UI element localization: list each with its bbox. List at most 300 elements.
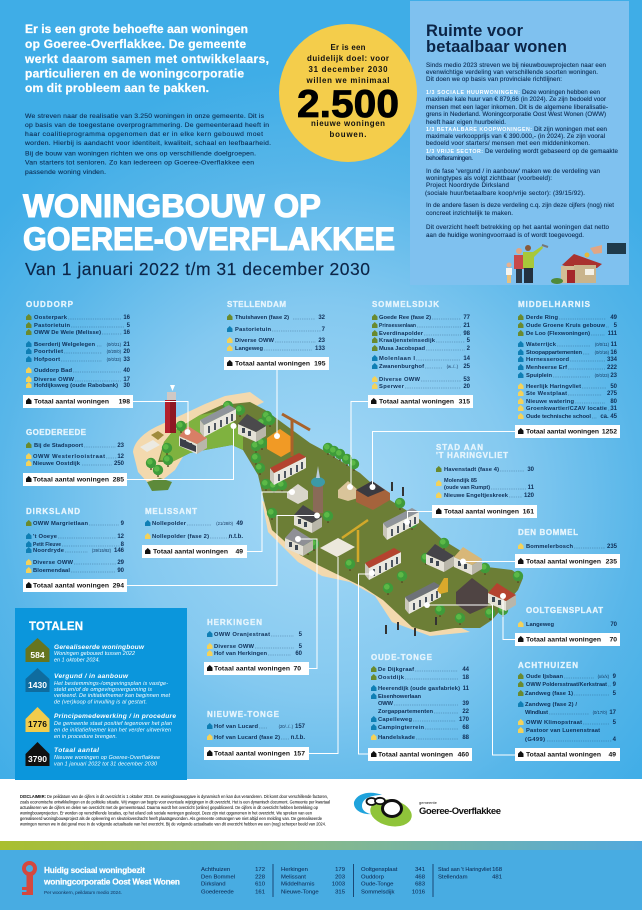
- total box: 294: [113, 582, 124, 590]
- total box: 49: [235, 548, 243, 556]
- total box: Totaal aantal woningen: [526, 752, 601, 758]
- table: sociaal woningbezit per kern: Melissant: [281, 874, 306, 880]
- district: Herkingen: HERKINGEN: [207, 618, 262, 627]
- total: principemedewerking: [26, 707, 176, 740]
- district: Middelharnis: Spuiplein: [526, 373, 552, 379]
- district: Dirksland: DIRKSLAND: [26, 507, 80, 516]
- total box: [368, 395, 473, 408]
- total box: Totaal aantal woningen: [153, 548, 228, 556]
- district: Middelharnis: 23: [610, 373, 618, 379]
- total box: 460: [458, 752, 469, 758]
- panel heading: betaalbaar wonen: [426, 38, 567, 56]
- district: Goedereede: 12: [117, 454, 125, 460]
- light green west meadow: [160, 410, 243, 462]
- intro body text: Van starters tot senioren. Zo kan iedereen op Goeree-Overflakkee een: [25, 160, 254, 166]
- bottom bar background: [0, 850, 642, 910]
- district: Middelharnis: 31: [610, 406, 618, 412]
- district: Achthuizen: 17: [609, 710, 617, 716]
- table: sociaal woningbezit per kern: 172: [255, 867, 265, 873]
- district: Ouddorp: (0/20/0): [107, 349, 122, 354]
- district: Ouddorp: Poortvliet: [34, 349, 63, 355]
- district: Achthuizen: Pastoor van Luenenstraat: [526, 728, 600, 734]
- district: Achthuizen: Zandweg (fase 1): [525, 691, 573, 697]
- district: Sommelsdijk: Sperwer: [379, 384, 405, 390]
- district: Stad aan 't Haringvliet: STAD AAN: [436, 443, 483, 452]
- district: Sommelsdijk: Everdinapolder: [379, 331, 424, 337]
- district: Middelharnis: (0/0/23): [595, 373, 610, 378]
- district: Achthuizen: 5: [613, 691, 617, 697]
- goal circle: 31 december 2030: [308, 65, 388, 74]
- intro body text: haar coalitieprogramma opgenomen dat er in elke kern gebouwd moet: [25, 131, 263, 138]
- district: Sommelsdijk: 25: [463, 364, 471, 370]
- district: Ouddorp: [23, 300, 133, 408]
- district: Stellendam: Pastorietuin: [235, 327, 271, 333]
- table: sociaal woningbezit per kern: 228: [255, 874, 266, 880]
- illustration: family with keys: [506, 245, 548, 283]
- district: Dirksland: 29: [117, 560, 125, 566]
- district: Herkingen: OWW Oranjestraat: [214, 632, 270, 638]
- panel text: In de andere fasen is deze verdeling c.q. zijn deze cijfers (nog) niet: [426, 202, 614, 209]
- disclaimer text: woningen nemen we in dat geval mee in de volgende actualisatie van het overzicht. Bij de volgende actualisatie van dit overzicht hebben we een (nog) scherper beeld van 2024.: [20, 822, 326, 826]
- district: Herkingen: 60: [295, 651, 303, 657]
- district: Stellendam: 133: [315, 346, 326, 352]
- district: Achthuizen: 9: [613, 682, 617, 688]
- district: Oude-Tonge: OUDE-TONGE: [371, 653, 433, 662]
- district: Middelharnis: Stoopappartementen: [526, 350, 582, 356]
- table: sociaal woningbezit per kern: [201, 864, 503, 897]
- disclaimer text: zoals economische ontwikkelingen en de politieke situatie. Wij vragen uw begrip voor eventuele wijzigingen in dit overzicht. Het is een dynamisch document. Gemeente per kwartaal: [20, 800, 330, 804]
- land: [158, 402, 523, 632]
- district: Ouddorp: Hofpoort: [34, 357, 60, 363]
- total box: Totaal aantal woningen: [34, 398, 109, 406]
- district: Goedereede: GOEDEREEDE: [26, 428, 87, 437]
- district: Achthuizen: OWW Klimopstraat: [526, 720, 582, 726]
- goal circle: [279, 24, 417, 162]
- total: vergund: [26, 668, 170, 706]
- district: Middelharnis: Nieuwe watering: [526, 399, 574, 405]
- district: Melissant: n.t.b.: [229, 534, 243, 540]
- district: Nieuwe-Tonge: Hof van Lucard: [214, 724, 258, 730]
- total box: 1252: [602, 428, 617, 436]
- logo: gemeente Goeree-Overflakkee: gemeente: [419, 800, 438, 805]
- district: Melissant: Nollepolder: [152, 521, 187, 527]
- district: Oude-Tonge: Capelleweg: [378, 717, 412, 723]
- district: Ouddorp: (0/0/21): [107, 342, 122, 347]
- district: Goedereede: 23: [117, 443, 125, 449]
- district: Oude-Tonge: Zorgappartementen: [378, 709, 433, 715]
- district: Oude-Tonge: 18: [462, 675, 470, 681]
- district: Herkingen: Diverse OWW: [214, 644, 255, 650]
- total box: 198: [119, 398, 130, 406]
- district: Ouddorp: 40: [123, 368, 131, 374]
- district: Dirksland: Petit Fleuve: [33, 542, 62, 548]
- district: Nieuwe-Tonge: n.t.b.: [291, 735, 305, 741]
- total: vergund: verleend. De initiatiefnemer kan beginnen met: [54, 693, 170, 699]
- district: Ouddorp: 17: [123, 377, 131, 383]
- district: Ouddorp: Diverse OWW: [34, 377, 75, 383]
- total box: Totaal aantal woningen: [33, 582, 109, 590]
- district: Den Bommel: Bommelerbosch: [526, 544, 573, 550]
- total box: [224, 357, 329, 370]
- district: Sommelsdijk: SOMMELSDIJK: [372, 300, 439, 309]
- district: Oude-Tonge: 44: [462, 667, 470, 673]
- district: Ouddorp: 5: [127, 323, 131, 329]
- district: Sommelsdijk: Prinsessenlaan: [379, 323, 416, 329]
- district: Melissant: [142, 507, 247, 558]
- district: Stad aan 't Haringvliet: (oude van Rumpt): [444, 485, 490, 491]
- subtitle date range: Van 1 januari 2022 t/m 31 december 2030: [25, 259, 370, 279]
- district: Nieuwe-Tonge: NIEUWE-TONGE: [207, 710, 280, 719]
- district: Nieuwe-Tonge: [204, 710, 309, 760]
- district: Middelharnis: 275: [607, 391, 618, 397]
- total: totaal aantal: Nieuwe woningen op Goeree-Overflakkee: [54, 755, 160, 761]
- panel text: woningtypes als volgt zichtbaar (voorbeeld):: [425, 175, 552, 182]
- panel text: evenwichtige verdeling van verschillende soorten woningen.: [426, 69, 598, 76]
- social housing heading: Per woonkern, peildatum medio 2024.: [44, 890, 122, 896]
- panel text: maximale kale huur van € 879,66 (in 2024). Ze zijn bedoeld voor: [426, 96, 606, 103]
- table: sociaal woningbezit per kern: Nieuwe-Tonge: [281, 890, 319, 896]
- district: Dirksland: OWW Margrietlaan: [33, 521, 88, 527]
- table: sociaal woningbezit per kern: 315: [335, 890, 346, 896]
- district: Stad aan 't Haringvliet: 120: [524, 493, 535, 499]
- district: Middelharnis: Heerlijk Haringvliet: [526, 384, 581, 390]
- district: Herkingen: [204, 618, 309, 675]
- district: Sommelsdijk: 21: [463, 323, 471, 329]
- district: Ouddorp: 20: [123, 349, 131, 355]
- district: Oude-Tonge: Oostdijk: [378, 675, 405, 681]
- district: Ouddorp: Pastorietuin: [34, 323, 70, 329]
- social housing heading: Huidig sociaal woningbezit: [44, 865, 145, 875]
- district: Oude-Tonge: OWW: [378, 701, 394, 707]
- total box: [204, 662, 309, 675]
- district: Middelharnis: ca. 45: [600, 414, 618, 420]
- total box: [204, 747, 309, 760]
- district: Oude-Tonge: 68: [462, 725, 470, 731]
- district: Sommelsdijk: 20: [463, 384, 471, 390]
- white disclaimer band: [0, 779, 642, 841]
- district: Dirksland: 12: [117, 534, 125, 540]
- district: Middelharnis: Ste Westplaat: [526, 391, 567, 397]
- disclaimer text: DISCLAIMER: De peildatum van de cijfers in dit overzicht is 1 oktober 2024. De woningbouwopgave is dynamisch en kan dus veranderen. Dit komt door verschillende factoren,: [20, 794, 328, 799]
- panel text: Deze woningen hebben een: [522, 89, 601, 96]
- total box: [515, 633, 620, 646]
- goal circle: willen we minimaal: [306, 76, 390, 85]
- district: Oude-Tonge: Eisenhowerlaan: [378, 694, 421, 700]
- panel text: Project Noordryde Dirksland: [426, 182, 510, 189]
- total box: [23, 579, 127, 592]
- total box: 161: [523, 508, 534, 516]
- goal circle: 2.500: [297, 83, 399, 126]
- shore posts: [386, 482, 436, 636]
- table: sociaal woningbezit per kern: 468: [415, 874, 426, 880]
- district: Oude-Tonge: 39: [462, 701, 470, 707]
- table: sociaal woningbezit per kern: Oude-Tonge: [361, 882, 394, 888]
- district: Middelharnis: Derde Ring: [526, 315, 558, 321]
- total: vergund: steld en/of de omgevingsvergunning is: [54, 687, 152, 693]
- total: gerealiseerd: Woningen gebouwd tussen 2022: [54, 651, 135, 657]
- trees: [146, 401, 523, 625]
- district: Oude-Tonge: 22: [462, 709, 470, 715]
- district: Oude-Tonge: De Dijkgraaf: [378, 667, 414, 673]
- district: Middelharnis: 5: [614, 323, 618, 329]
- disclaimer text: woningbouwprojecten. Er worden op verschillende locaties, op het eiland ook sociale woningen gesloopt. Deze zijn niet opgenomen in het overzicht. We spreken van een: [20, 810, 313, 816]
- district: Ouddorp: 16: [123, 330, 131, 336]
- district: Dirksland: 146: [114, 548, 125, 554]
- district: Ooltgensplaat: Langeweg: [526, 622, 554, 628]
- total: gerealiseerd: 584: [30, 650, 45, 660]
- total: principemedewerking: en in procedure brengen.: [54, 734, 117, 740]
- table: sociaal woningbezit per kern: Stad aan 't Haringvliet: [438, 867, 491, 873]
- main title: GOEREE-OVERFLAKKEE: [23, 221, 395, 257]
- total box: [23, 395, 133, 408]
- district: Ooltgensplaat: OOLTGENSPLAAT: [526, 606, 603, 615]
- panel: totalen: [15, 608, 187, 780]
- district: Sommelsdijk: (w../..): [447, 364, 459, 369]
- total: principemedewerking: en de initiatiefnemer kan het verder uitwerken: [54, 728, 171, 734]
- panel text: mensen met een lager inkomen. Dit is de algemene liberalisatie-: [426, 104, 608, 111]
- district: Middelharnis: MIDDELHARNIS: [518, 300, 591, 309]
- main title: [23, 188, 395, 257]
- district: Sommelsdijk: Molenlaan I: [379, 356, 415, 362]
- total box: 70: [609, 636, 617, 644]
- beach sand: [133, 392, 470, 636]
- total: gerealiseerd: Gerealiseerde woningbouw: [54, 644, 145, 651]
- right panel: betaalbaar wonen: [410, 1, 629, 285]
- district: Oude-Tonge: Campingterrein: [378, 725, 424, 731]
- total box: 285: [113, 476, 124, 484]
- district: Achthuizen: (x/x/x): [598, 674, 610, 679]
- intro body text: worden. Hierbij is aandacht voor identiteit, kwaliteit, schaal en leefbaarheid.: [24, 140, 271, 147]
- panel text: Sinds medio 2023 streven we bij nieuwbouwprojecten naar een: [426, 62, 607, 69]
- intro body text: op basis van de toegestane overprogrammering. De gemeenteraad heeft in: [25, 122, 269, 129]
- total box: [432, 505, 537, 518]
- district: Goedereede: OWW Westerlooistraat: [33, 454, 105, 460]
- illustration: house and hand: [551, 243, 626, 284]
- panel text: Dit overzicht heeft betrekking op het aantal woningen dat netto: [426, 224, 610, 231]
- building plot: [320, 538, 355, 557]
- table: sociaal woningbezit per kern: 179: [335, 867, 345, 873]
- district: Stad aan 't Haringvliet: Nieuwe Engeltjeskreek: [444, 493, 509, 499]
- district: Achthuizen: 4: [613, 737, 617, 743]
- district: Stellendam: 23: [318, 338, 326, 344]
- table: sociaal woningbezit per kern: Sommelsdijk: [361, 890, 394, 896]
- table: sociaal woningbezit per kern: Ooltgensplaat: [361, 867, 398, 873]
- panel text: (sociale huur/betaalbare koop/vrije sector): (39/15/92).: [425, 190, 585, 197]
- table: sociaal woningbezit per kern: 341: [415, 867, 425, 873]
- district: Middelharnis: (0/0/16): [595, 350, 610, 355]
- total: vergund: 1430: [28, 680, 47, 690]
- table: sociaal woningbezit per kern: Stellendam: [438, 874, 468, 880]
- panel text: heeft haar eigen huurbeleid.: [426, 119, 506, 126]
- district: Dirksland: Bloemendaal: [33, 568, 70, 574]
- total: gerealiseerd: en 1 oktober 2024.: [54, 658, 100, 664]
- district: Stellendam: Langeweg: [235, 346, 263, 352]
- district: Dirksland: Noordryde: [33, 548, 65, 554]
- district: Sommelsdijk: 2: [467, 346, 471, 352]
- total box: [515, 554, 620, 568]
- panel text: [425, 62, 619, 239]
- district: Middelharnis: 334: [607, 357, 618, 363]
- district: Stad aan 't Haringvliet: 'T HARINGVLIET: [436, 451, 508, 460]
- table: sociaal woningbezit per kern: Dirksland: [201, 882, 226, 888]
- intro heading: op Goeree-Overflakkee. De gemeente: [25, 37, 246, 51]
- district: Sommelsdijk: 5: [467, 338, 471, 344]
- district: Achthuizen: OWW Poldersstraat/Kerkstraat: [526, 682, 607, 688]
- district: Stellendam: Thuishaven (fase 2): [235, 315, 289, 321]
- district: Sommelsdijk: [368, 300, 473, 408]
- intro heading: werkt daarom samen met ontwikkelaars,: [24, 52, 269, 66]
- district: Sommelsdijk: Goede Ree (fase 2): [379, 315, 431, 321]
- district: Nieuwe-Tonge: 157: [295, 724, 306, 730]
- panel text: grens in Nederland. Woningcorporatie Oost West Wonen (OWW): [426, 111, 606, 118]
- district: Middelharnis: [515, 300, 620, 438]
- disclaimer text: actualiseren we de cijfers en delen we overzicht met de gemeenteraad. Daarna wordt het overzicht (online) gepubliceerd. De cijfers in dit overzicht hebben betrekking op: [20, 805, 319, 810]
- table: sociaal woningbezit per kern: Achthuizen: [201, 867, 230, 873]
- district: Oude-Tonge: 170: [459, 717, 470, 723]
- district: Dirksland: 9: [121, 521, 125, 527]
- disclaimer text: gerealiseerd woningbouwproject als de oplevering en sleuteloverdracht heeft plaatsgevonden. Als gemeente ontvangen we niet altijd een melding van. De gerealiseerde: [20, 816, 323, 821]
- district: Oude-Tonge: Handelskade: [378, 735, 416, 741]
- panel heading: Ruimte voor: [426, 22, 524, 40]
- total box: 195: [314, 360, 326, 368]
- total: vergund: de (ver)koop of invulling is al gestart.: [54, 700, 147, 706]
- total box: 49: [608, 752, 616, 758]
- district: Herkingen: 5: [299, 632, 303, 638]
- district: Achthuizen: Oude Ijsbaan: [526, 674, 563, 680]
- total box: Totaal aantal woningen: [235, 360, 310, 368]
- intro body text: [24, 113, 271, 176]
- goal circle: bouwen.: [330, 130, 366, 139]
- district: Sommelsdijk: Kraaijensteinsedijk: [379, 338, 436, 344]
- district: Achthuizen: (0/17/0): [593, 710, 608, 715]
- district: Achthuizen: [515, 661, 620, 761]
- district: Stad aan 't Haringvliet: 30: [527, 467, 535, 473]
- total: totaal aantal: 3790: [28, 754, 47, 764]
- totalen heading: TOTALEN: [29, 621, 83, 633]
- district: Goedereede: [23, 428, 127, 486]
- main title: WONINGBOUW OP: [23, 188, 321, 224]
- table: sociaal woningbezit per kern: Herkingen: [281, 867, 308, 873]
- district: Oude-Tonge: 88: [462, 735, 470, 741]
- district: Middelharnis: (0/0/11): [595, 342, 610, 347]
- district: Middelharnis: 49: [610, 315, 618, 321]
- total: totaal aantal: [26, 742, 160, 768]
- water tower: [313, 480, 323, 513]
- social housing heading: woningcorporatie Oost West Wonen: [43, 876, 180, 886]
- district: Dirksland: (39/15/92): [92, 548, 112, 553]
- total: totaal aantal: Totaal aantal: [54, 747, 99, 754]
- district: Sommelsdijk: Zwanenburghof: [379, 364, 424, 370]
- district: Ouddorp: 33: [123, 357, 131, 363]
- district: Middelharnis: 111: [608, 331, 618, 337]
- district: Sommelsdijk: 77: [463, 315, 471, 321]
- houses and buildings: [179, 405, 516, 614]
- district: Goedereede: 250: [114, 461, 125, 467]
- intro heading: Er is een grote behoefte aan woningen: [25, 22, 248, 36]
- lighthouse: [165, 385, 176, 433]
- district: Nieuwe-Tonge: Hof van Lucard (fase 2): [214, 735, 280, 741]
- goal circle: duidelijk doel: voor: [307, 54, 389, 63]
- district: Herkingen: 5: [299, 644, 303, 650]
- district: Goedereede: Nieuwe Oostdijk: [33, 461, 81, 467]
- district: Ouddorp: 21: [123, 342, 131, 348]
- intro body text: passende woning vinden.: [25, 169, 106, 176]
- district: Stad aan 't Haringvliet: [432, 443, 537, 518]
- panel text: behoefteramingen.: [426, 155, 473, 162]
- intro heading: particulieren en de woningcorporatie: [25, 66, 244, 80]
- total box: [142, 545, 247, 558]
- district: Middelharnis: Hernesseroord: [526, 357, 569, 363]
- table: sociaal woningbezit per kern: 161: [255, 890, 265, 896]
- district: Ouddorp: OWW De Weie (Melisse): [34, 330, 101, 336]
- district: Sommelsdijk: 53: [463, 377, 471, 383]
- district: Stellendam: 32: [318, 315, 326, 321]
- plots on the west beach: [140, 431, 164, 452]
- district: Stad aan 't Haringvliet: Havenstadt (fase 4): [444, 467, 499, 473]
- total box: 315: [459, 398, 470, 406]
- total box: Totaal aantal woningen: [378, 752, 453, 758]
- total box: 235: [606, 558, 617, 566]
- total box: Totaal aantal woningen: [526, 636, 601, 644]
- district: Achthuizen: (G499): [525, 737, 545, 743]
- total: vergund: Vergund / in aanbouw: [54, 673, 129, 680]
- district: Stellendam: Diverse OWW: [235, 338, 275, 344]
- district: Middelharnis: 222: [607, 365, 618, 371]
- total box: 157: [294, 750, 305, 758]
- table: sociaal woningbezit per kern: Middelharnis: [281, 882, 314, 888]
- district: Ouddorp: 30: [123, 383, 131, 389]
- district: Stellendam: STELLENDAM: [227, 300, 286, 309]
- yellow crane: [342, 520, 368, 562]
- district: Ouddorp: (0/0/33): [107, 357, 122, 362]
- district: Middelharnis: 80: [610, 399, 618, 405]
- district: Sommelsdijk: Musa Jacobspad: [379, 346, 425, 352]
- social housing heading: [43, 865, 180, 896]
- district: Stellendam: 7: [322, 327, 326, 333]
- district: Stad aan 't Haringvliet: 11: [528, 485, 535, 491]
- district: Ouddorp: Boerderij Welgelegen: [34, 342, 95, 348]
- table: sociaal woningbezit per kern: 683: [415, 882, 426, 888]
- district: Dirksland: [23, 507, 127, 592]
- district: Herkingen: Hof van Herkingen: [214, 651, 267, 657]
- intro body text: We streven naar de realisatie van 3.250 woningen in onze gemeente. Dit is: [25, 113, 265, 120]
- district: Melissant: MELISSANT: [145, 507, 197, 516]
- panel text: In de fase 'vergund / in aanbouw' maken we de verdeling van: [426, 168, 601, 175]
- table: sociaal woningbezit per kern: Goedereede: [201, 890, 234, 896]
- district: Nieuwe-Tonge: (20/../..): [279, 724, 294, 729]
- goal circle: nieuwe woningen: [311, 119, 385, 128]
- total box: [368, 748, 472, 761]
- total: gerealiseerd: [26, 638, 145, 664]
- panel text: bedoeld voor starters/ mensen met een middeninkomen.: [426, 140, 590, 147]
- district: Achthuizen: 9: [613, 674, 617, 680]
- small islet: [147, 478, 172, 491]
- total box: Totaal aantal woningen: [379, 398, 454, 406]
- table: sociaal woningbezit per kern: Den Bommel: [201, 874, 235, 880]
- total box: Totaal aantal woningen: [526, 558, 601, 566]
- intro body text: Bij de bouw van woningen richten we ons op verschillende doelgroepen.: [25, 150, 256, 158]
- district: Middelharnis: Groenkwartier/CZAV locatie: [526, 406, 608, 412]
- district: Dirksland: 90: [117, 568, 125, 574]
- panel text: 1/3 SOCIALE HUURWONINGEN:: [426, 90, 520, 96]
- total box: Totaal aantal woningen: [444, 508, 519, 516]
- panel text: 1/3 BETAALBARE KOOPWONINGEN:: [426, 127, 532, 133]
- district: Oude-Tonge: [368, 653, 472, 761]
- total: totaal aantal: van 1 januari 2022 tot 31 december 2030: [54, 762, 157, 768]
- district: Ooltgensplaat: [515, 606, 620, 646]
- district: Den Bommel: DEN BOMMEL: [518, 528, 578, 537]
- table: sociaal woningbezit per kern: 1016: [412, 890, 426, 896]
